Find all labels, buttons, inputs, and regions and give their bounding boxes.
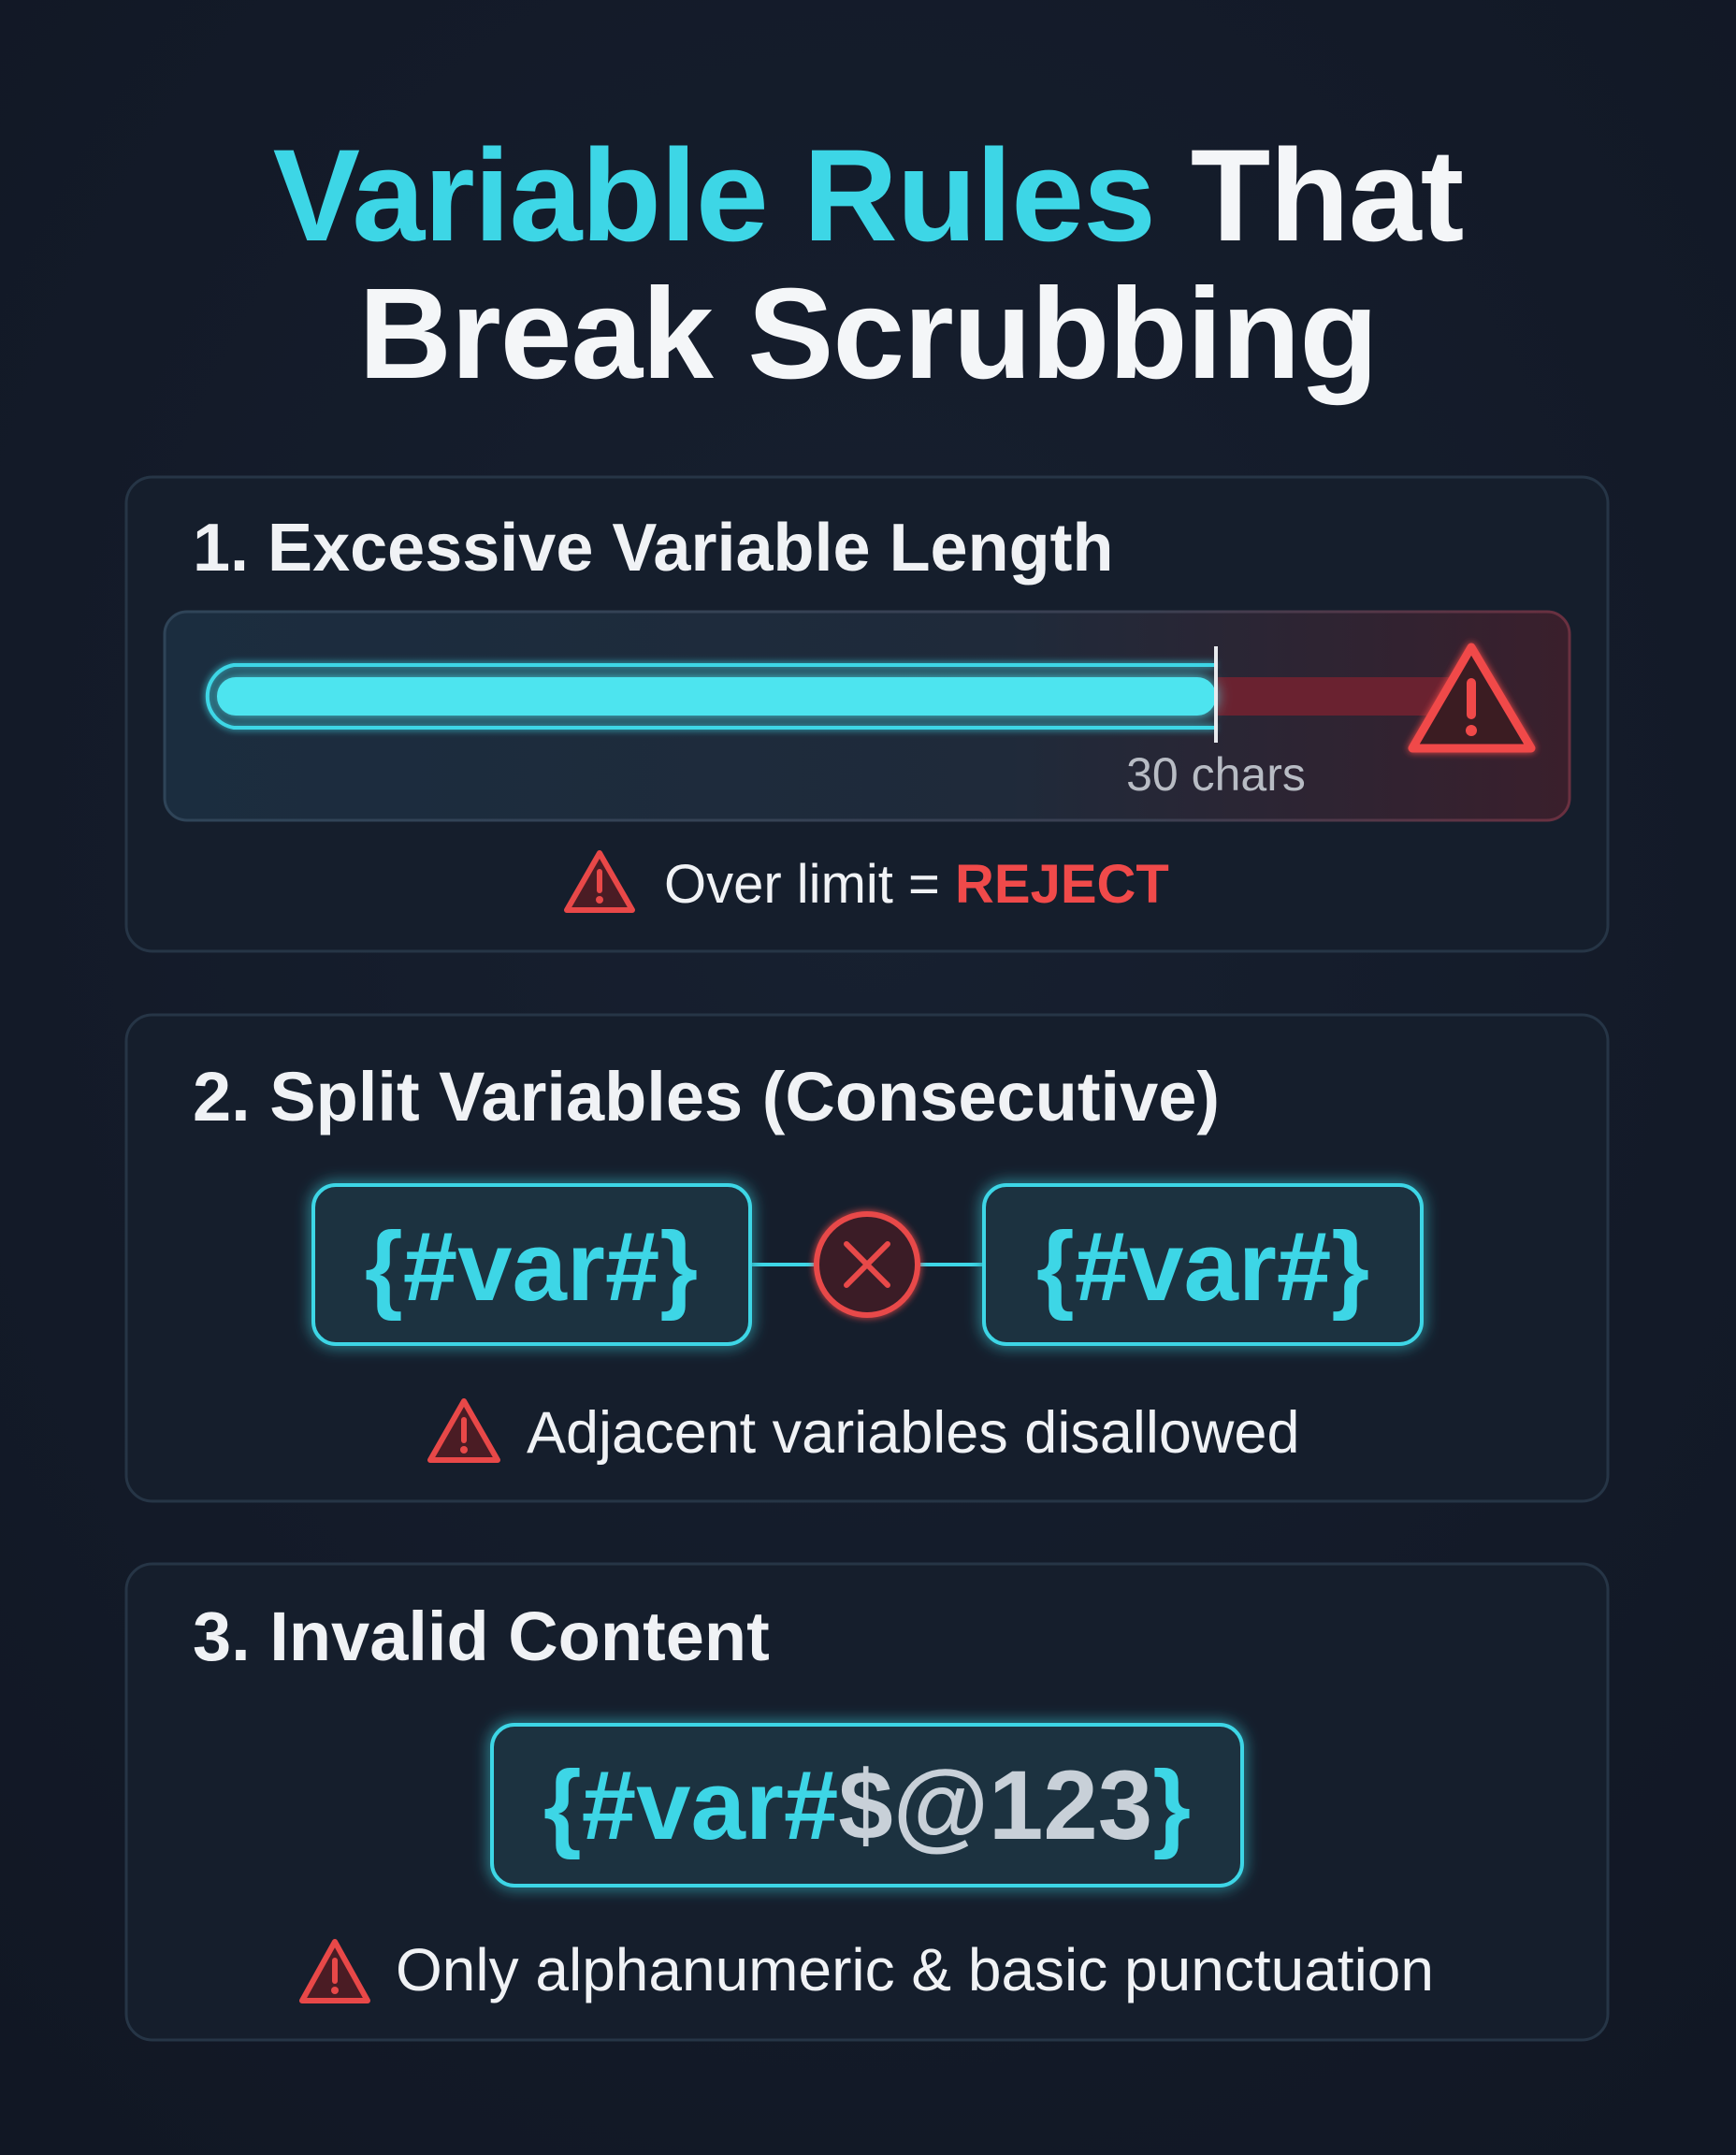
label: 30 chars: 30 chars	[1126, 748, 1306, 801]
caption 2: Adjacent variables disallowed	[527, 1400, 1299, 1466]
connector lines	[750, 1263, 984, 1266]
panel: split variables	[126, 1015, 1608, 1501]
caption 3: Only alphanumeric & basic punctuation	[396, 1936, 1434, 2003]
invalid variable box: {#var#$@123}	[543, 1751, 1191, 1860]
icon: red x circle	[817, 1214, 918, 1315]
title: Variable Rules That	[273, 122, 1463, 268]
panel: excessive variable length	[126, 477, 1608, 951]
heading 1: 1. Excessive Variable Length	[193, 511, 1114, 586]
icon: large warning triangle	[1412, 647, 1531, 748]
caption 1: Over limit = REJECT	[664, 854, 1169, 915]
variable box left	[313, 1185, 750, 1344]
title: Break Scrubbing	[358, 262, 1378, 406]
invalid variable box	[492, 1725, 1242, 1886]
heading 3: 3. Invalid Content	[193, 1598, 770, 1675]
variable box right	[984, 1185, 1422, 1344]
panel: invalid content	[126, 1564, 1608, 2040]
heading 2: 2. Split Variables (Consecutive)	[193, 1058, 1220, 1135]
variable box right: {#var#}	[1036, 1212, 1369, 1322]
variable box left: {#var#}	[365, 1212, 698, 1322]
title	[273, 122, 1463, 406]
length bar	[165, 612, 1570, 820]
